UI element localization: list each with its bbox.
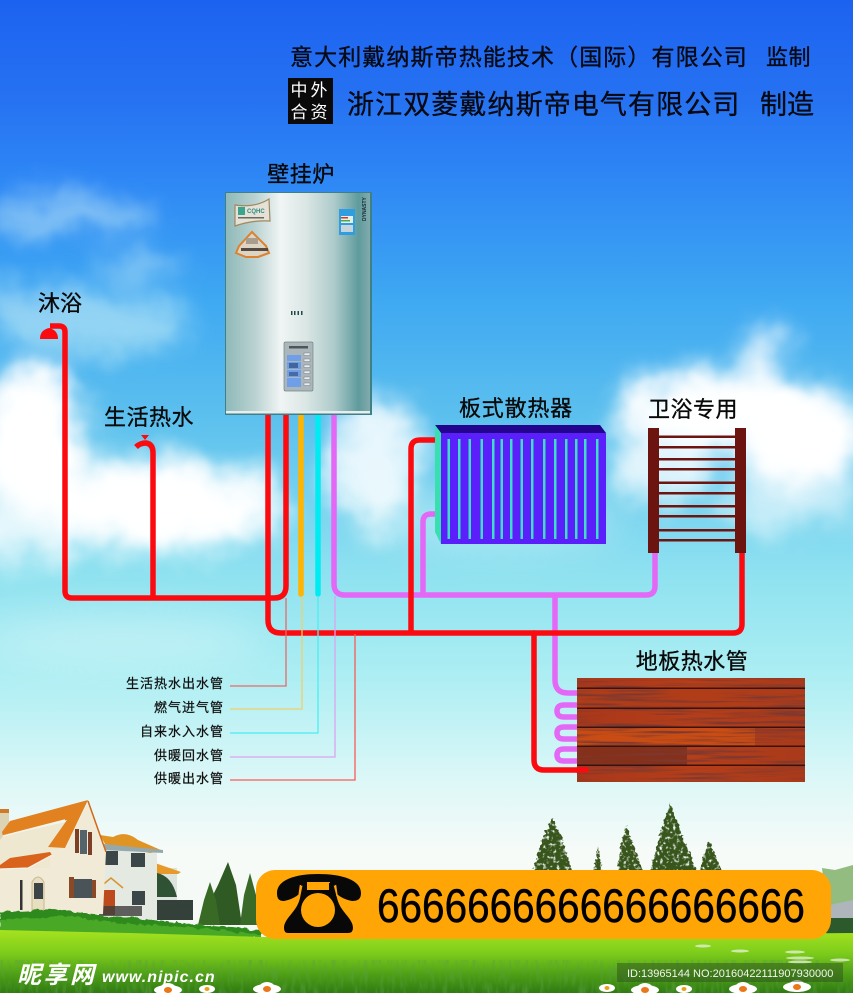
towel radiator xyxy=(648,428,746,553)
pipes xyxy=(50,326,742,770)
watermark: site: 昵享网 xyxy=(17,962,97,989)
phone number bar xyxy=(256,870,831,939)
trees right xyxy=(533,803,722,872)
icon: telephone xyxy=(277,874,361,933)
header: supervising company: 监制 xyxy=(766,45,811,70)
pipe: heating supply, red xyxy=(268,414,742,770)
sticker: energy label xyxy=(339,209,355,235)
clouds xyxy=(0,198,853,662)
pipe: gas, yellow xyxy=(298,414,304,594)
pipe: domestic hot water, red xyxy=(50,326,286,598)
header: manufacturer: 制造 xyxy=(760,90,814,120)
main house body xyxy=(0,800,106,914)
label: plate radiator: 板式散热器 xyxy=(459,396,573,421)
red pipe end on floor xyxy=(577,767,586,773)
watermark: site xyxy=(17,962,216,989)
brand text: DYNASTY xyxy=(362,196,368,221)
pipe: heating return, purple xyxy=(334,414,655,761)
icon: tap xyxy=(141,435,149,440)
watermark: image id xyxy=(617,963,843,982)
mountains right xyxy=(822,865,853,934)
pipe legend labels xyxy=(126,676,224,786)
sticker: certification xyxy=(235,199,270,226)
header: manufacturer: 浙江双菱戴纳斯帝电气有限公司 xyxy=(347,90,740,120)
wood floor xyxy=(577,678,805,782)
watermark: image id: ID:13965144 NO:20160422111907930000 xyxy=(627,968,833,980)
label: shower: 沐浴 xyxy=(38,291,82,316)
icon: shower head xyxy=(40,328,58,339)
sticker: certification: CQHC xyxy=(247,209,265,215)
phone number: 6666666666666666666 xyxy=(377,880,805,933)
pipe legend labels: 自来水入水管 xyxy=(140,724,224,739)
trees left xyxy=(198,862,260,925)
boiler unit xyxy=(225,192,372,415)
control panel xyxy=(284,342,313,391)
badge: joint venture: 合资 xyxy=(290,103,330,122)
label: bathroom use: 卫浴专用 xyxy=(648,397,738,422)
leader lines xyxy=(230,596,355,780)
plate radiator xyxy=(435,425,606,544)
pipe legend labels: 燃气进气管 xyxy=(154,700,224,715)
pipe legend labels: 生活热水出水管 xyxy=(126,676,224,691)
side house xyxy=(99,834,163,920)
watermark: site: www.nipic.cn xyxy=(102,969,216,986)
indicator dots xyxy=(291,311,302,315)
badge: joint venture: 中外 xyxy=(290,81,330,100)
pipe: cold water, cyan xyxy=(315,414,321,594)
daisies xyxy=(154,944,850,993)
label: domestic hot water: 生活热水 xyxy=(104,405,194,430)
label: boiler: 壁挂炉 xyxy=(267,162,335,187)
lawn xyxy=(0,930,853,993)
house xyxy=(0,800,193,920)
label: floor heating pipe: 地板热水管 xyxy=(636,649,748,674)
pipe legend labels: 供暖出水管 xyxy=(154,771,224,786)
header: supervising company: 意大利戴纳斯帝热能技术（国际）有限公司 xyxy=(290,44,748,70)
right house wing xyxy=(155,863,193,920)
badge: joint venture xyxy=(288,78,333,124)
hedge xyxy=(0,910,262,938)
pipe legend labels: 供暖回水管 xyxy=(154,748,224,763)
sticker: quality badge xyxy=(236,232,269,257)
